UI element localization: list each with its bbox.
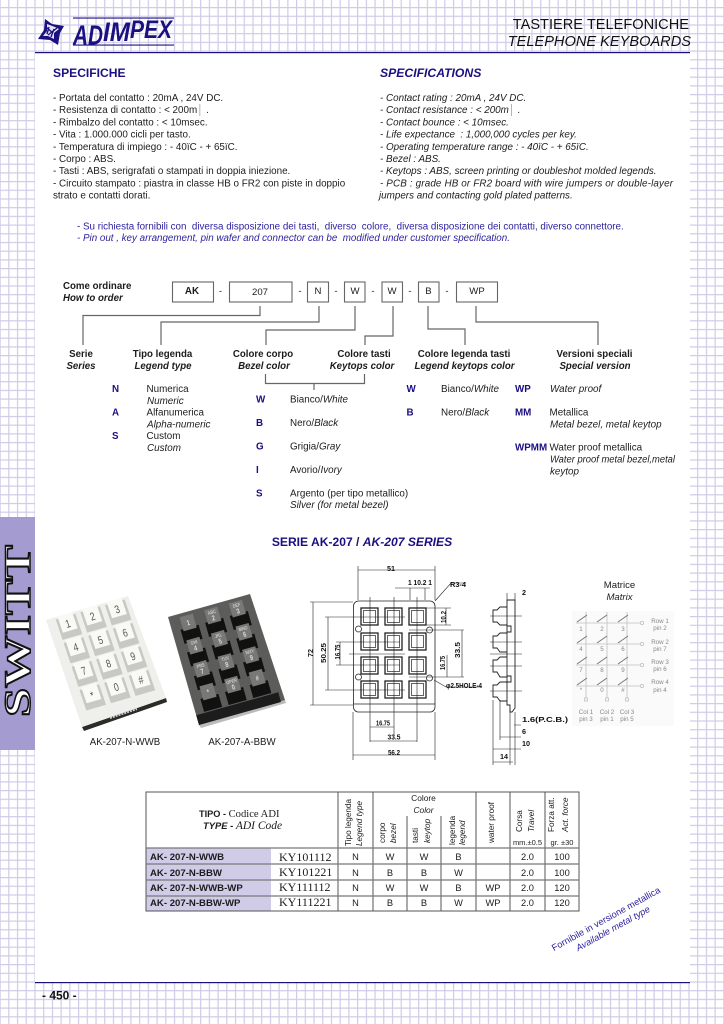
heading: specifications: SPECIFICATIONS bbox=[380, 66, 481, 80]
table header: rotated columns bbox=[344, 797, 570, 846]
table rows: AK- 207-N-WWB-WP bbox=[150, 883, 243, 894]
matrix diagram: 3 bbox=[621, 626, 625, 633]
photo: black keypad bbox=[168, 594, 286, 728]
customization note bbox=[77, 222, 624, 244]
logo: Adimpex: AD bbox=[72, 20, 103, 50]
specifications text: Italian: - Temperatura di impiego : - 40ïC - + 65ïC. bbox=[53, 142, 237, 153]
side tab bbox=[0, 517, 39, 750]
legend keytops color options: Nero/Black bbox=[441, 408, 490, 418]
table rows: B bbox=[455, 852, 462, 862]
table rows: B bbox=[421, 898, 427, 908]
photo: black keypad: TUV bbox=[221, 655, 230, 662]
photo: black keypad: 7 bbox=[200, 668, 205, 676]
legend keytops color options: W bbox=[406, 384, 416, 395]
header rule bbox=[35, 52, 690, 53]
specifications text: English: - Contact bounce : < 10msec. bbox=[380, 118, 509, 128]
technical drawing: dimensions: 1 10.2 1 bbox=[408, 578, 432, 587]
table rows: W bbox=[386, 852, 395, 862]
column headings: Special version bbox=[559, 361, 631, 372]
photo: black keypad: # bbox=[255, 675, 260, 683]
column headings: Legend keytops color bbox=[414, 361, 516, 372]
matrix diagram: Col 2 bbox=[600, 709, 615, 716]
photo: white keypad: * bbox=[89, 690, 96, 703]
photo captions: AK-207-A-BBW bbox=[208, 737, 277, 748]
legend keytops color options: Bianco/White bbox=[441, 384, 500, 395]
callout: metal version: Available metal type bbox=[573, 904, 652, 953]
table header: rotated columns: tasti bbox=[411, 828, 420, 843]
special version options: WPMM bbox=[515, 442, 547, 454]
technical drawing: front view bbox=[310, 566, 482, 760]
order code boxes: - bbox=[219, 286, 222, 297]
photo captions: AK-207-N-WWB bbox=[90, 737, 160, 748]
technical drawing: side view: 2 bbox=[522, 588, 526, 597]
technical drawing: dimensions: φ2.5HOLE-4 bbox=[446, 681, 482, 690]
table header: rotated columns: water proof bbox=[487, 801, 496, 844]
order code boxes: 207 bbox=[252, 287, 268, 298]
specifications text: English: - Keytops : ABS, screen printing or doubleshot molded legends. bbox=[380, 166, 657, 177]
legend type options: Numerica bbox=[146, 384, 189, 395]
special version options: Metallica bbox=[550, 408, 589, 418]
specifications text: English: - Life expectance : 1,000,000 cycles per key. bbox=[380, 130, 577, 140]
table rows: KY101221 bbox=[279, 865, 332, 879]
order code boxes bbox=[172, 282, 498, 302]
photo: black keypad: * bbox=[206, 688, 211, 697]
photo: white keypad: # bbox=[137, 674, 146, 687]
legend type options bbox=[112, 384, 211, 454]
matrix diagram: * bbox=[580, 687, 583, 694]
table rules bbox=[146, 792, 579, 911]
photo captions bbox=[90, 737, 277, 748]
column headings: Colore corpo bbox=[233, 349, 293, 360]
table rows: 120 bbox=[554, 898, 570, 908]
table rows: 100 bbox=[554, 852, 570, 862]
table header: rotated columns: Travel bbox=[527, 810, 536, 832]
photo: black keypad: 2 bbox=[211, 614, 217, 623]
matrix heading: Matrice bbox=[604, 580, 635, 591]
specifications text: Italian: - Tasti : ABS, serigrafati o stampati in doppia iniezione. bbox=[53, 166, 290, 177]
matrix diagram: pin 6 bbox=[653, 666, 667, 673]
callout: metal version: Fornibile in versione metallica bbox=[550, 885, 663, 953]
customization note: - Su richiesta fornibili con diversa disposizione dei tasti, diverso colore, diversa disposizione dei contatti, diverso connettore. bbox=[77, 222, 624, 232]
matrix diagram: 1 bbox=[579, 626, 583, 633]
photo: black keypad: 3 bbox=[236, 608, 241, 616]
how to order label: How to order bbox=[63, 293, 124, 304]
specifications text: English: - Contact rating : 20mA , 24V DC. bbox=[380, 93, 526, 104]
technical drawing: dimensions: 16.75 bbox=[376, 718, 390, 728]
legend type options: A bbox=[112, 408, 119, 418]
photo: black keypad: 8 bbox=[224, 661, 230, 669]
photo: black keypad: 0 bbox=[231, 684, 236, 692]
special version options: Water proof metal bezel,metal bbox=[550, 454, 676, 466]
technical drawing: side view: 1.6(P.C.B.) bbox=[522, 715, 569, 724]
series heading: SERIE AK-207 / AK-207 SERIES bbox=[272, 535, 452, 549]
technical drawing: dimensions: 33.5 bbox=[453, 642, 462, 658]
bezel color options: Avorio/Ivory bbox=[290, 465, 343, 476]
technical drawing: dimensions: 56.2 bbox=[388, 748, 400, 757]
photo: black keypad: 6 bbox=[242, 631, 248, 639]
table rows: N bbox=[352, 898, 359, 908]
bezel color options: B bbox=[256, 418, 263, 429]
matrix diagram: 9 bbox=[621, 667, 625, 674]
matrix heading: Matrix bbox=[606, 592, 634, 603]
table header: type: TYPE - bbox=[203, 820, 236, 831]
specifications text: English: jumpers and contacting gold plated patterns. bbox=[377, 190, 573, 202]
bezel color options: Silver (for metal bezel) bbox=[290, 500, 388, 511]
technical drawing: dimensions: 16.75 bbox=[438, 656, 447, 670]
matrix diagram: pin 3 bbox=[579, 716, 593, 723]
table rows: KY111221 bbox=[279, 895, 331, 909]
photo: white keypad: 3 bbox=[113, 604, 122, 617]
bezel color options: Nero/Black bbox=[290, 418, 339, 429]
special version options: WP bbox=[515, 384, 531, 395]
technical drawing: dimensions: 16.75 bbox=[333, 644, 342, 660]
matrix diagram: Col 1 bbox=[579, 709, 594, 716]
photo: black keypad: WXY bbox=[245, 648, 255, 656]
photo: black keypad: JKL bbox=[214, 632, 223, 639]
order code boxes: WP bbox=[469, 286, 485, 297]
table header: color group: Color bbox=[413, 805, 435, 815]
specifications text: Italian: - Corpo : ABS. bbox=[53, 154, 116, 165]
specifications text: Italian: - Resistenza di contatto : < 200m│ . bbox=[53, 104, 209, 116]
table header: color group bbox=[411, 793, 436, 815]
table rows: W bbox=[454, 898, 463, 908]
table rows: W bbox=[420, 852, 429, 862]
table rows: KY101112 bbox=[279, 850, 331, 864]
photo: black keypad: ABC bbox=[207, 608, 217, 616]
photo: white keypad: 1 bbox=[64, 618, 73, 631]
title: TASTIERE TELEFONICHE bbox=[513, 17, 689, 33]
matrix diagram: 4 bbox=[579, 646, 583, 653]
matrix diagram: Col 3 bbox=[620, 709, 635, 716]
how to order label: Come ordinare bbox=[63, 281, 132, 292]
photo: white keypad: 4 bbox=[72, 642, 81, 655]
matrix diagram: 8 bbox=[600, 667, 604, 674]
how to order label bbox=[63, 281, 132, 304]
matrix diagram: 6 bbox=[621, 646, 625, 653]
order code boxes: - bbox=[445, 286, 449, 297]
order code boxes: - bbox=[298, 286, 302, 297]
order code boxes: - bbox=[334, 286, 338, 297]
table header: tolerances: mm.±0.5 bbox=[513, 838, 542, 847]
photo: black keypad: 1 bbox=[186, 619, 191, 628]
column headings: Legend type bbox=[134, 361, 192, 372]
photo: white keypad: 0 bbox=[112, 681, 121, 695]
matrix diagram: 7 bbox=[579, 667, 583, 674]
specifications text: Italian: - Rimbalzo del contatto : < 10msec. bbox=[53, 118, 208, 128]
bezel color options: Argento (per tipo metallico) bbox=[290, 488, 408, 500]
order code boxes: N bbox=[315, 286, 322, 297]
specifications text: English bbox=[377, 93, 674, 202]
matrix diagram: 2 bbox=[600, 626, 604, 633]
table header: rotated columns: Legend type bbox=[355, 800, 364, 846]
technical drawing: side view: 14 bbox=[500, 752, 508, 761]
column headings: Tipo legenda bbox=[133, 349, 193, 360]
photo: white keypad: 8 bbox=[104, 658, 113, 671]
technical drawing: dimensions bbox=[306, 564, 482, 757]
legend keytops color options: B bbox=[406, 408, 414, 418]
specifications text: English: - PCB : grade HB or FR2 board with wire jumpers or double-layer bbox=[380, 178, 674, 190]
bezel color options: I bbox=[256, 465, 259, 476]
column headings: Colore tasti bbox=[337, 349, 391, 360]
column headings: Colore legenda tasti bbox=[418, 349, 510, 360]
special version options: keytop bbox=[550, 466, 580, 478]
table rows: 2.0 bbox=[521, 868, 534, 878]
matrix diagram: pin 7 bbox=[653, 646, 667, 653]
table header: rotated columns: Act. force bbox=[561, 797, 570, 833]
specifications text: Italian: - Vita : 1.000.000 cicli per tasto. bbox=[53, 130, 191, 140]
product table bbox=[146, 792, 579, 911]
legend type options: Alpha-numeric bbox=[146, 420, 211, 430]
bezel color options: Grigia/Gray bbox=[290, 442, 341, 452]
special version options: Metal bezel, metal keytop bbox=[550, 420, 662, 430]
legend type options: N bbox=[112, 384, 119, 395]
table rows: N bbox=[352, 883, 359, 893]
technical drawing: dimensions: 50.25 bbox=[319, 643, 328, 663]
logo: Adimpex bbox=[38, 16, 174, 50]
table header: rotated columns: Tipo legenda bbox=[344, 799, 353, 846]
connector lines bbox=[83, 306, 598, 390]
order code boxes: - bbox=[371, 286, 375, 297]
technical drawing: dimensions: 51 bbox=[387, 564, 395, 573]
technical drawing: dimensions: R3-4 bbox=[450, 580, 466, 589]
table rows: N bbox=[352, 868, 359, 878]
table header: rotated columns: legenda bbox=[448, 815, 457, 845]
column headings: Keytops color bbox=[330, 361, 396, 372]
table rows: B bbox=[455, 883, 462, 893]
matrix diagram bbox=[572, 611, 674, 726]
order code boxes: AK bbox=[185, 286, 199, 297]
specifications text: Italian: - Portata del contatto : 20mA , 24V DC. bbox=[53, 93, 223, 104]
table header: tolerances bbox=[513, 838, 573, 847]
photo: white keypad: 9 bbox=[129, 651, 138, 664]
bezel color options: S bbox=[256, 488, 263, 500]
table header: rotated columns: Corsa bbox=[515, 810, 524, 832]
technical drawing: dimensions: 72 bbox=[306, 649, 315, 657]
table rows: W bbox=[420, 883, 429, 893]
table rows: 2.0 bbox=[521, 883, 534, 893]
photo: black keypad: PRS bbox=[196, 662, 205, 669]
specifications text: Italian: strato e contatti dorati. bbox=[53, 190, 150, 202]
legend keytops color options bbox=[406, 384, 500, 418]
heading: specifiche: SPECIFICHE bbox=[53, 66, 126, 80]
title: TELEPHONE KEYBOARDS bbox=[508, 34, 691, 50]
photo: white keypad bbox=[46, 596, 167, 731]
photo: white keypad: 7 bbox=[80, 665, 89, 678]
photo: black keypad: MNO bbox=[238, 625, 249, 633]
table header: tolerances: gr. ±30 bbox=[551, 838, 573, 847]
table header: rotated columns: keytop bbox=[423, 818, 432, 843]
table rows: B bbox=[387, 868, 393, 878]
bezel color options bbox=[256, 394, 408, 511]
order code boxes: - bbox=[408, 286, 412, 297]
table rows: W bbox=[454, 868, 463, 878]
customization note: - Pin out , key arrangement, pin wafer and connector can be modified under customer specification. bbox=[77, 233, 510, 244]
table rows: KY111112 bbox=[279, 880, 331, 894]
column headings: Versioni speciali bbox=[557, 349, 632, 360]
technical drawing: side view: 6 bbox=[522, 727, 526, 736]
specifications text: Italian bbox=[53, 93, 346, 202]
matrix diagram: 0 bbox=[600, 687, 604, 694]
photo: black keypad: DEF bbox=[232, 602, 241, 609]
special version options: Water proof bbox=[550, 384, 603, 395]
matrix diagram: # bbox=[621, 687, 625, 694]
technical drawing: dimensions: 10.2 bbox=[439, 611, 448, 623]
bezel color options: G bbox=[256, 442, 264, 452]
matrix diagram: 5 bbox=[600, 646, 604, 653]
table rows: B bbox=[387, 898, 393, 908]
matrix diagram: pin 4 bbox=[653, 687, 667, 694]
table rows: 2.0 bbox=[521, 898, 534, 908]
order code boxes: W bbox=[387, 286, 397, 297]
page number: - 450 - bbox=[42, 988, 77, 1002]
row label shading bbox=[146, 848, 271, 911]
title bbox=[508, 17, 691, 50]
special version options bbox=[515, 384, 676, 478]
specifications text: English: - Bezel : ABS. bbox=[380, 154, 441, 165]
table rows: 100 bbox=[554, 868, 570, 878]
order code boxes: W bbox=[350, 286, 360, 297]
specifications text: English: - Operating temperature range : - 40ïC - + 65ïC. bbox=[380, 142, 589, 153]
technical drawing: side view bbox=[490, 588, 569, 765]
column headings: Series bbox=[66, 361, 96, 372]
specifications text: English: - Contact resistance : < 200m│ . bbox=[380, 104, 520, 116]
table rows: AK- 207-N-WWB bbox=[150, 852, 224, 863]
legend type options: Alfanumerica bbox=[146, 408, 204, 418]
table header: rotated columns: bezel bbox=[389, 823, 398, 843]
table rows: AK- 207-N-BBW bbox=[150, 868, 223, 879]
table header: type: TIPO - Codice ADI bbox=[199, 809, 280, 820]
matrix heading bbox=[604, 580, 635, 603]
logo: Adimpex: PEX bbox=[130, 16, 173, 44]
logo: Adimpex: IM bbox=[103, 17, 130, 47]
matrix diagram: Row 1 bbox=[651, 618, 669, 625]
legend type options: Numeric bbox=[147, 396, 184, 407]
table rows: WP bbox=[486, 883, 500, 893]
technical drawing: side view: 10 bbox=[522, 739, 530, 748]
special version options: MM bbox=[515, 408, 531, 418]
order code boxes: B bbox=[425, 286, 432, 297]
matrix diagram: Row 3 bbox=[651, 659, 669, 666]
photo: black keypad: 4 bbox=[193, 645, 199, 653]
table rows: B bbox=[421, 868, 427, 878]
table rows bbox=[150, 850, 570, 909]
table header: type: ADI Code bbox=[235, 820, 282, 832]
table rows: AK- 207-N-BBW-WP bbox=[150, 898, 241, 909]
column headings: Bezel color bbox=[238, 361, 291, 372]
table header: color group: Colore bbox=[411, 793, 436, 803]
table header: rotated columns: legend bbox=[458, 820, 467, 845]
photo: black keypad: GHI bbox=[190, 639, 198, 646]
technical drawing: dimensions: 33.5 bbox=[388, 732, 400, 742]
matrix diagram: pin 1 bbox=[600, 716, 614, 723]
special version options: Water proof metallica bbox=[550, 442, 643, 454]
matrix diagram: Row 2 bbox=[651, 639, 669, 646]
photo: black keypad: 9 bbox=[249, 654, 255, 663]
column headings: Serie bbox=[69, 349, 93, 360]
footer rule bbox=[35, 982, 690, 983]
column headings bbox=[66, 349, 632, 372]
matrix diagram: pin 5 bbox=[620, 716, 634, 723]
specifications text: Italian: - Circuito stampato : piastra in classe HB o FR2 con piste in doppio bbox=[53, 178, 346, 190]
photo: white keypad: 6 bbox=[121, 627, 130, 640]
legend type options: S bbox=[112, 431, 119, 442]
table rows: W bbox=[386, 883, 395, 893]
photo: white keypad: 5 bbox=[97, 634, 105, 648]
matrix diagram: Row 4 bbox=[651, 679, 669, 686]
bezel color options: W bbox=[256, 394, 266, 406]
legend type options: Custom bbox=[147, 443, 181, 454]
table rows: WP bbox=[486, 898, 500, 908]
table rows: 2.0 bbox=[521, 852, 534, 862]
photo: black keypad: OPER bbox=[226, 677, 238, 686]
legend type options: Custom bbox=[146, 431, 180, 442]
table header: rotated columns: Forza att. bbox=[547, 797, 556, 832]
photo: white keypad: 2 bbox=[89, 611, 97, 624]
table rows: 120 bbox=[554, 883, 570, 893]
table rows: N bbox=[352, 852, 359, 862]
table header: rotated columns: corpo bbox=[378, 822, 387, 843]
photo: black keypad: 5 bbox=[218, 638, 223, 646]
bezel color options: Bianco/White bbox=[290, 394, 349, 406]
matrix diagram: pin 2 bbox=[653, 625, 667, 632]
